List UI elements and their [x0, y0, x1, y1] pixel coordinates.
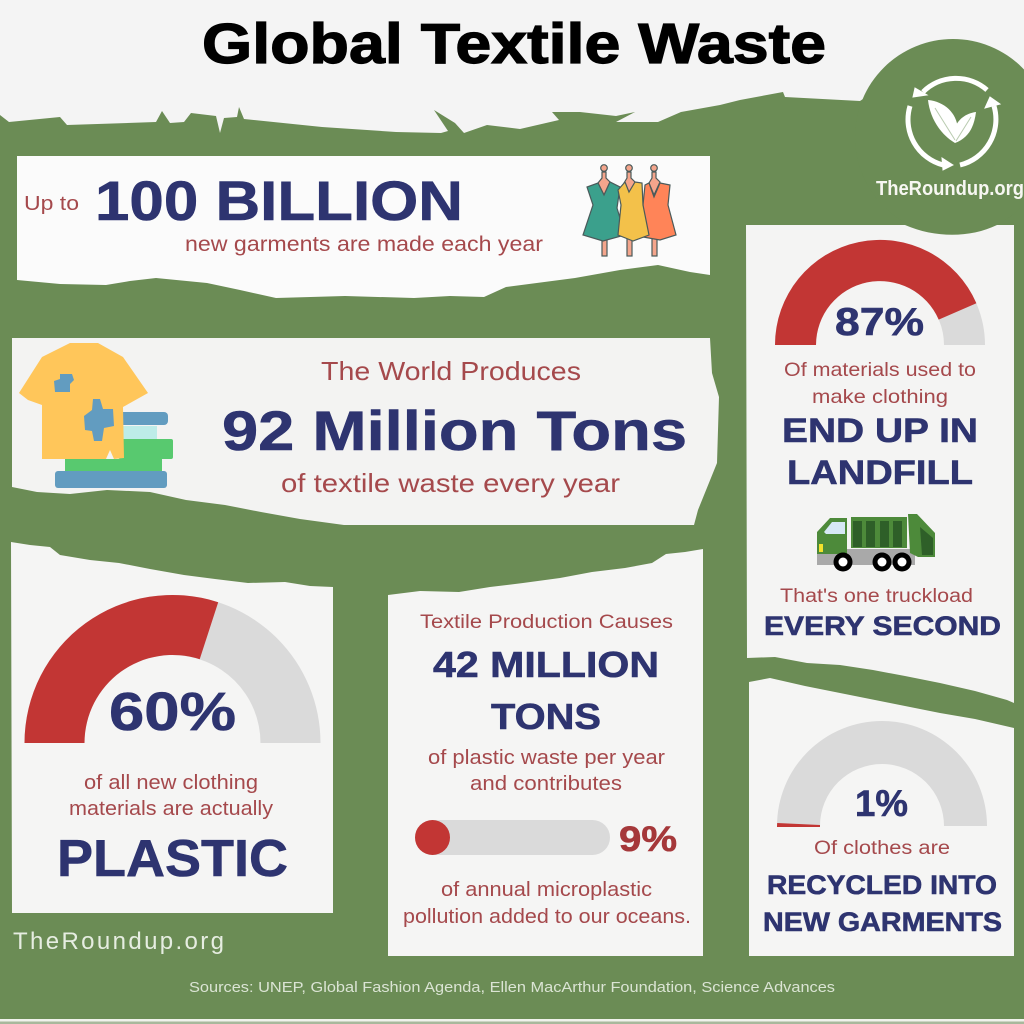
gauge: 60 percent [24, 595, 321, 743]
headline: end up in landfill: END UP IN [782, 412, 978, 450]
text: plastic waste [428, 747, 665, 795]
headline: 42 million tons: 42 MILLION [433, 644, 659, 685]
panel: 87 percent landfill [746, 225, 1014, 703]
panel: 42 million tons [388, 549, 703, 956]
sources: Sources: UNEP, Global Fashion Agenda, Ellen MacArthur Foundation, Science Advances [189, 979, 835, 996]
text: new clothing materials [69, 772, 273, 820]
text: new clothing materials: materials are actually [69, 798, 273, 820]
text: the world produces: The World Produces [321, 356, 581, 386]
headline: recycled into new garments: NEW GARMENTS [763, 907, 1002, 937]
top torn paper header [0, 0, 1024, 133]
panel: 1 percent recycled [749, 678, 1014, 956]
text: of clothes are: Of clothes are [814, 838, 950, 859]
logo badge circle [855, 39, 1024, 235]
number: 60 percent: 60% [109, 682, 236, 742]
headline: 42 million tons: TONS [491, 696, 601, 737]
icon: garbage truck [817, 514, 935, 572]
icon: recycling arrows [908, 78, 1000, 170]
text: materials used: make clothing [812, 386, 948, 408]
text: microplastic pollution: pollution added to our oceans. [403, 906, 691, 928]
panel: 100 billion garments [17, 156, 710, 298]
headline: recycled into new garments [763, 870, 1002, 937]
text: materials used [784, 359, 976, 408]
icon: three dresses [583, 165, 676, 256]
headline: end up in landfill: LANDFILL [787, 454, 973, 492]
text: plastic waste: and contributes [470, 773, 622, 795]
headline: end up in landfill [782, 412, 978, 492]
gauge: 87 percent [775, 240, 985, 345]
text: one truckload: That's one truckload [780, 586, 973, 607]
panel: 92 million tons [12, 338, 719, 525]
text: new garments: new garments are made each year [185, 233, 543, 256]
logo [876, 78, 1024, 200]
text: materials used: Of materials used to [784, 359, 976, 381]
title: Global Textile Waste [202, 12, 826, 76]
number: 87 percent: 87% [835, 301, 924, 344]
text: plastic waste: of plastic waste per year [428, 747, 665, 769]
panel: 60 percent plastic [11, 542, 333, 913]
brand text: TheRoundup.org [13, 928, 224, 955]
headline: 92 million tons: 92 Million Tons [222, 399, 687, 462]
headline: plastic: PLASTIC [57, 830, 288, 888]
progress bar: 9 percent [415, 820, 610, 855]
gauge: 1 percent [777, 721, 987, 827]
headline: recycled into new garments: RECYCLED INTO [767, 870, 997, 900]
headline: 42 million tons [433, 644, 659, 737]
text: textile production causes: Textile Production Causes [420, 612, 673, 633]
number: 1 percent: 1% [855, 783, 908, 824]
icon: patched t-shirt [19, 343, 148, 459]
text: of textile waste: of textile waste every year [281, 468, 620, 498]
text: new clothing materials: of all new clothing [84, 772, 258, 794]
headline: every second: EVERY SECOND [764, 611, 1001, 641]
text: microplastic pollution: of annual microplastic [441, 879, 652, 901]
headline: 100 billion: 100 BILLION [95, 169, 463, 232]
icon: stack of clothes [55, 412, 173, 488]
number: 9 percent: 9% [619, 820, 677, 859]
bottom edge strip [0, 1019, 1024, 1024]
icon: leaves [928, 100, 976, 143]
text: up to: Up to [24, 193, 79, 215]
text: microplastic pollution [403, 879, 691, 928]
